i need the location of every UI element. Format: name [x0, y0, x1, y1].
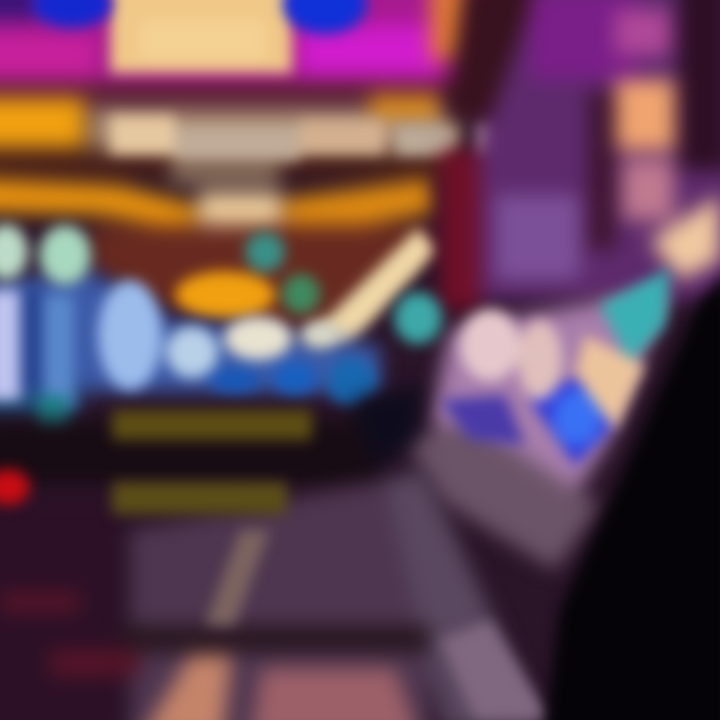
slot machines: [405, 290, 670, 570]
ceiling: [0, 0, 490, 330]
floor: [0, 470, 545, 720]
ceiling detail: cream band and orange glow: [110, 116, 583, 350]
blue ceiling lights: [32, 0, 367, 34]
right-hand wall: [440, 0, 720, 310]
cream chandelier panel: [110, 0, 292, 73]
left blue machines: [0, 270, 380, 415]
dark floor band: [0, 385, 425, 485]
black foreground machine: [545, 270, 720, 720]
